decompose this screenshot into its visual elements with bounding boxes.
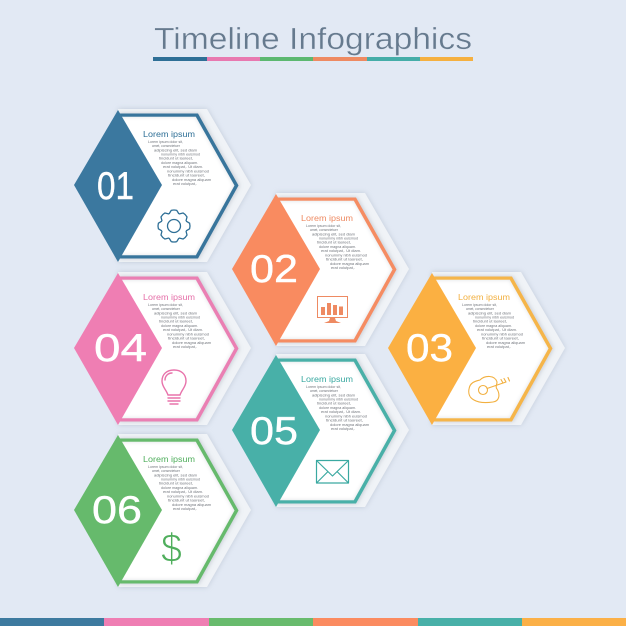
panel: step 05: erat volutpat,.	[331, 427, 355, 431]
panel: step 03	[388, 272, 565, 425]
panel: step 04: tincidunt ut laoreet,	[168, 337, 205, 341]
panel: step 05: 05	[250, 410, 298, 453]
panel: step 03: nonummy nibh euismod	[475, 316, 514, 320]
panel: step 01: erat volutpat,.	[173, 182, 197, 186]
panel: step 05: dolore magna aliquam	[330, 423, 369, 427]
panel: step 05: nonummy nibh euismod	[319, 398, 358, 402]
panel: step 01: dolore magna aliquam.	[161, 161, 198, 165]
panel: step 05: adipiscing elit, sed diam	[312, 393, 355, 397]
panel: step 06: 06	[92, 489, 142, 532]
title: Timeline Infographics	[154, 21, 472, 56]
panel: step 04: nonummy nibh euismod	[161, 316, 200, 320]
panel: step 02: tincidunt ut laoreet,	[317, 241, 351, 245]
panel: step 05: Lorem ipsum	[301, 374, 353, 384]
panel: step 02: Lorem ipsum dolor sit,	[306, 224, 341, 228]
panel: step 04: erat volutpat,.	[173, 345, 197, 349]
panel: step 04: dolore magna aliquam	[172, 341, 211, 345]
icon: gear	[158, 210, 190, 242]
panel: step 03: erat volutpat,. Ut diam.	[477, 328, 517, 332]
panel: step 02: 02	[250, 248, 298, 291]
panel: step 03: dolore magna aliquam.	[475, 324, 512, 328]
panel: step 06: dolore magna aliquam.	[161, 486, 198, 490]
panel: step 06: Lorem ipsum	[143, 454, 195, 464]
panel: step 03: Lorem ipsum	[458, 292, 510, 302]
panel: step 02: Lorem ipsum	[301, 213, 353, 223]
panel: step 04: erat volutpat,. Ut diam.	[163, 328, 203, 332]
panel: step 04	[74, 272, 251, 425]
panel: step 06: adipiscing elit, sed diam	[154, 473, 197, 477]
icon: light bulb	[162, 370, 186, 404]
panel: step 01: tincidunt ut laoreet,	[168, 174, 205, 178]
panel: step 02: erat volutpat,.	[331, 266, 355, 270]
panel: step 02: erat volutpat,. Ut diam.	[321, 249, 361, 253]
panel: step 01: nonummy nibh euismod	[167, 169, 209, 173]
panel: step 02: adipiscing elit, sed diam	[312, 232, 355, 236]
panel: step 01: adipiscing elit, sed diam	[154, 148, 197, 152]
panel: step 02: tincidunt ut laoreet,	[326, 258, 363, 262]
panel: step 05: Lorem ipsum dolor sit,	[306, 385, 341, 389]
panel: step 04: nonummy nibh euismod	[167, 332, 209, 336]
panel: step 01: tincidunt ut laoreet,	[159, 157, 193, 161]
icon: envelope	[316, 460, 348, 483]
panel: step 03: 03	[406, 327, 453, 370]
panel: step 01: nonummy nibh euismod	[161, 152, 200, 156]
panel: step 04: Lorem ipsum	[143, 292, 195, 302]
panel: step 06: dolore magna aliquam	[172, 503, 211, 507]
panel: step 03: tincidunt ut laoreet,	[482, 337, 519, 341]
panel: step 03: adipiscing elit, sed diam	[468, 311, 511, 315]
panel: step 03: dolore magna aliquam	[486, 341, 525, 345]
panel: step 05: tincidunt ut laoreet,	[326, 419, 363, 423]
panel: step 04: amet, consectetuer	[152, 307, 181, 311]
panel: step 06: amet, consectetuer	[152, 469, 181, 473]
bottom colour bar	[0, 618, 626, 626]
panel: step 04: Lorem ipsum dolor sit,	[148, 303, 183, 307]
panel: step 02: nonummy nibh euismod	[325, 253, 367, 257]
panel: step 01	[74, 109, 251, 262]
panel: step 02: amet, consectetuer	[310, 228, 339, 232]
panel: step 02: dolore magna aliquam	[330, 262, 369, 266]
panel: step 02: nonummy nibh euismod	[319, 236, 358, 240]
panel: step 04: 04	[94, 327, 147, 370]
panel: step 06: tincidunt ut laoreet,	[159, 482, 193, 486]
panel: step 06: nonummy nibh euismod	[161, 478, 200, 482]
panel: step 05: tincidunt ut laoreet,	[317, 402, 351, 406]
panel: step 01: dolore magna aliquam	[172, 178, 211, 182]
panel: step 03: nonummy nibh euismod	[481, 332, 523, 336]
panel: step 05: erat volutpat,. Ut diam.	[321, 410, 361, 414]
panel: step 06: Lorem ipsum dolor sit,	[148, 465, 183, 469]
panel: step 05	[232, 354, 409, 507]
panel: step 03: erat volutpat,.	[487, 345, 511, 349]
panel: step 04: dolore magna aliquam.	[161, 324, 198, 328]
icon: monitor chart	[318, 296, 348, 323]
icon: guitar	[469, 376, 510, 403]
icon: dollar: $	[161, 525, 182, 571]
panel: step 02: dolore magna aliquam.	[319, 245, 356, 249]
title underline	[153, 57, 473, 61]
panel: step 05: dolore magna aliquam.	[319, 406, 356, 410]
panel: step 06: erat volutpat,.	[173, 507, 197, 511]
panel: step 05: nonummy nibh euismod	[325, 414, 367, 418]
panel: step 06	[74, 434, 251, 587]
panel: step 03: Lorem ipsum dolor sit,	[462, 303, 497, 307]
panel: step 04: adipiscing elit, sed diam	[154, 311, 197, 315]
panel: step 03: tincidunt ut laoreet,	[473, 320, 507, 324]
panel: step 01: amet, consectetuer	[152, 144, 181, 148]
panel: step 02	[232, 193, 409, 346]
panel: step 06: tincidunt ut laoreet,	[168, 499, 205, 503]
panel: step 06: nonummy nibh euismod	[167, 494, 209, 498]
panel: step 01: Lorem ipsum	[143, 129, 195, 139]
panel: step 06: erat volutpat,. Ut diam.	[163, 490, 203, 494]
panel: step 01: 01	[97, 165, 134, 208]
panel: step 01: erat volutpat,. Ut diam.	[163, 165, 203, 169]
panel: step 01: Lorem ipsum dolor sit,	[148, 140, 183, 144]
panel: step 04: tincidunt ut laoreet,	[159, 320, 193, 324]
panel: step 05: amet, consectetuer	[310, 389, 339, 393]
panel: step 03: amet, consectetuer	[466, 307, 495, 311]
